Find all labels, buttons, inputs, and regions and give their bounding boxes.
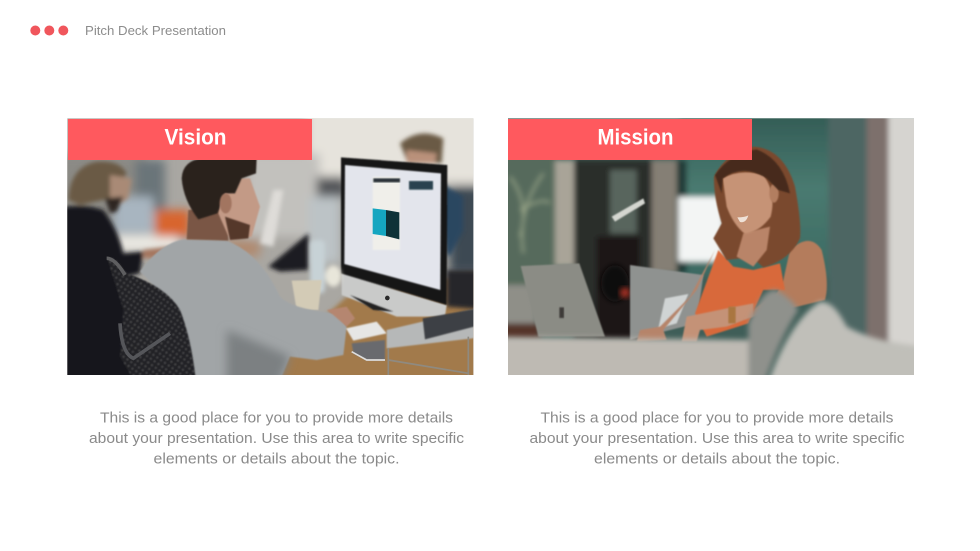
icon: three red dots — [30, 26, 68, 36]
text block: vision description: This is a good place for you to provide more details — [100, 410, 453, 426]
heading: vision: Vision — [164, 124, 226, 149]
bottle and cup — [310, 240, 341, 293]
front sofa — [508, 287, 914, 375]
left person — [67, 160, 168, 375]
back pillow — [630, 265, 703, 340]
face — [723, 172, 773, 234]
photo: woman with laptop on sofa — [508, 118, 914, 375]
arm and shoulder — [752, 240, 828, 318]
heading: mission: Mission — [598, 124, 674, 149]
text block: mission description: about your presentation. Use this area to write specific — [530, 430, 905, 447]
panel: vision — [67, 118, 474, 375]
table — [282, 273, 474, 375]
hand — [327, 307, 355, 327]
desk items behind — [260, 190, 308, 272]
monitor — [341, 157, 447, 305]
photo: man working at desktop computer — [67, 118, 474, 375]
hair — [182, 158, 257, 219]
banner: vision — [68, 118, 312, 160]
banner: mission — [508, 118, 752, 160]
text block: mission description — [530, 410, 905, 468]
text block: vision description: about your presentation. Use this area to write specific — [89, 430, 465, 447]
text block: mission description: elements or details about the topic. — [594, 450, 840, 468]
keyboard and laptop — [346, 322, 387, 341]
hair crown — [715, 149, 790, 193]
panel: mission — [508, 118, 914, 375]
text block: mission description: This is a good place for you to provide more details — [540, 410, 894, 426]
deck name: Pitch Deck Presentation — [85, 23, 226, 38]
orange top — [695, 250, 785, 337]
laptop — [521, 263, 605, 337]
chair — [108, 258, 196, 375]
arms and hands — [637, 250, 715, 342]
main sitting man shirt — [140, 239, 348, 375]
monitor stand — [342, 273, 447, 317]
hair back — [713, 147, 800, 267]
text block: vision description — [89, 410, 465, 468]
header: dots and deck name — [30, 23, 226, 38]
text block: vision description: elements or details about the topic. — [154, 450, 400, 468]
background person right — [400, 134, 463, 257]
neck — [737, 227, 770, 267]
neck and face — [187, 207, 228, 241]
